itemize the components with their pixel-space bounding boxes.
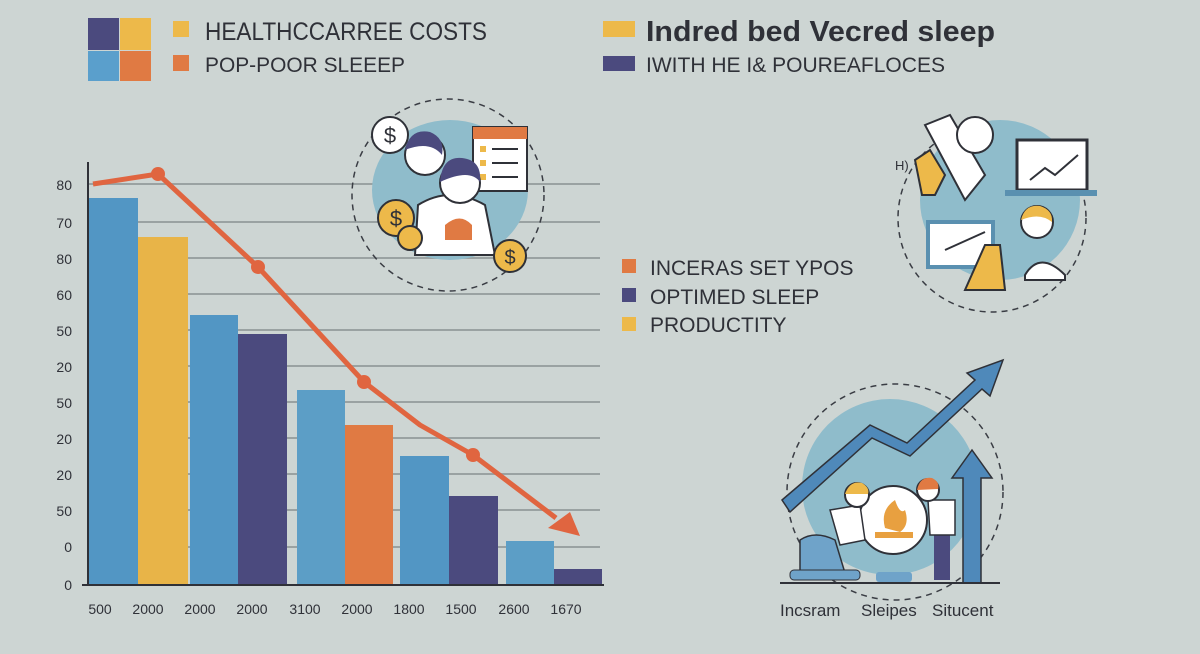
icon: healthcare people: $ [390, 206, 402, 231]
y axis labels: 20 [56, 431, 72, 447]
x axis labels: 2000 [236, 601, 268, 617]
legend item: poor sleep: POP-POOR SLEEEP [205, 54, 405, 77]
legend item: with he: IWITH HE I& POUREAFLOCES [646, 54, 945, 77]
y axis labels: 0 [64, 539, 72, 555]
item: inceras: INCERAS SET YPOS [650, 257, 853, 280]
x axis labels: 2600 [498, 601, 530, 617]
x axis labels: 1800 [393, 601, 425, 617]
y axis labels: 80 [56, 251, 72, 267]
y axis labels: 60 [56, 287, 72, 303]
x axis labels: 1670 [550, 601, 582, 617]
bottom labels: Situcent [932, 601, 994, 620]
y axis labels [56, 177, 72, 593]
legend item: healthcare costs: HEALTHCCARREE COSTS [205, 18, 487, 46]
icon: workers with computers: H) [895, 158, 909, 173]
x axis labels [88, 601, 582, 617]
trend line arrow [93, 167, 580, 536]
icon: healthcare people: $ [384, 123, 396, 148]
bottom labels: Incsram [780, 601, 840, 620]
y axis labels: 50 [56, 503, 72, 519]
item: optimed sleep: OPTIMED SLEEP [650, 286, 819, 309]
middle legend [622, 257, 853, 337]
y axis labels: 50 [56, 323, 72, 339]
bar chart [56, 162, 604, 617]
y axis labels: 80 [56, 177, 72, 193]
item: productity: PRODUCTITY [650, 314, 786, 337]
y axis labels: 0 [64, 577, 72, 593]
x axis labels: 1500 [445, 601, 477, 617]
bottom labels [780, 601, 994, 620]
icon: healthcare people [352, 99, 544, 291]
legend block squares [88, 18, 151, 81]
x axis labels: 2000 [132, 601, 164, 617]
y axis labels: 70 [56, 215, 72, 231]
x axis labels: 2000 [341, 601, 373, 617]
y axis labels: 20 [56, 359, 72, 375]
icon: growth arrow with people [780, 360, 1003, 600]
legend item: indred bed: Indred bed Vecred sleep [646, 16, 995, 48]
y axis labels: 20 [56, 467, 72, 483]
x axis labels: 2000 [184, 601, 216, 617]
x axis labels: 500 [88, 601, 112, 617]
y axis labels: 50 [56, 395, 72, 411]
top legend [88, 16, 995, 81]
bars [89, 198, 602, 585]
icon: healthcare people: $ [504, 247, 516, 269]
bottom labels: Sleipes [861, 601, 917, 620]
icon: workers with computers [895, 115, 1097, 312]
x axis labels: 3100 [289, 601, 321, 617]
